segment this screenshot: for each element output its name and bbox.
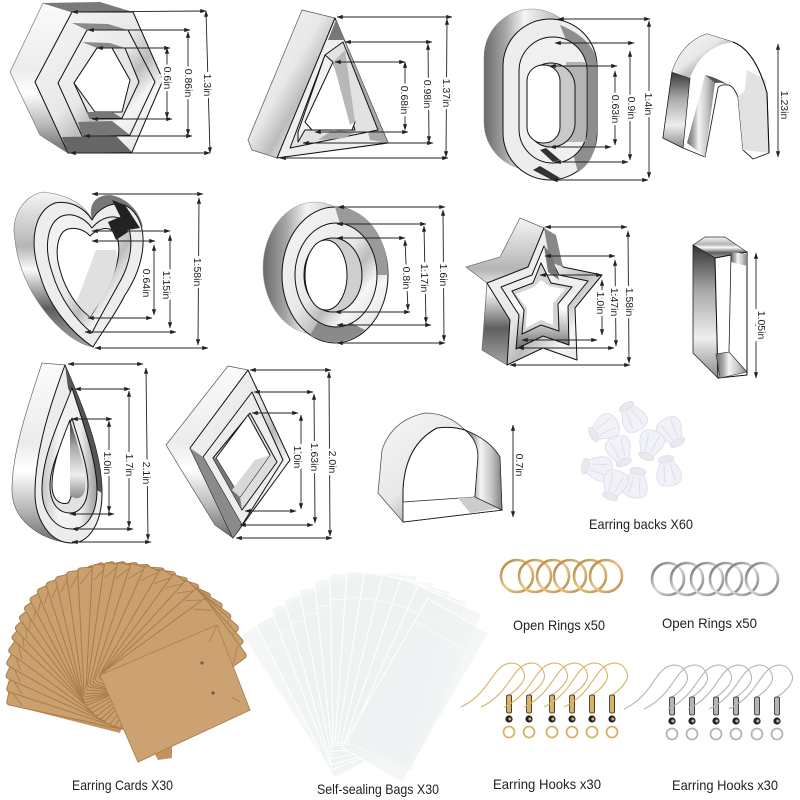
gold open rings: [501, 560, 622, 592]
dimensions: teardrop: 1.0in: [101, 452, 113, 475]
dimensions: star: 1.58in: [623, 288, 635, 316]
dimensions: triangle: 0.98in: [421, 80, 433, 108]
dimensions: D-shaped: [513, 425, 525, 517]
dimensions: heart: 1.58in: [191, 258, 203, 286]
slot cutter: [693, 237, 747, 378]
dimensions: heart: 0.64in: [140, 269, 152, 297]
dimensions: arch: 1.23in: [778, 91, 790, 119]
kraft earring cards fan: [5, 561, 250, 762]
round cutter set: [263, 202, 388, 343]
heart cutter set: [14, 192, 143, 347]
dimensions: hexagon: 0.86in: [182, 69, 194, 97]
dimensions: slot: 1.05in: [755, 311, 767, 339]
star cutter set: [466, 218, 602, 365]
dimensions: hexagon: [70, 11, 213, 153]
silver earring hooks: [624, 665, 793, 740]
triangle cutter set: [248, 10, 388, 158]
dimensions: round: [335, 207, 449, 343]
teardrop cutter set: [12, 363, 102, 543]
dimensions: hexagon: 1.3in: [201, 74, 213, 97]
dimensions: diamond: [236, 370, 338, 538]
dimensions: oval: 1.4in: [642, 93, 654, 116]
dimensions: heart: 1.15in: [160, 271, 172, 299]
gold earring hooks: [461, 663, 628, 738]
dimensions: star: [510, 227, 635, 365]
dimensions: triangle: [280, 17, 452, 158]
dimensions: diamond: 1.63in: [308, 443, 320, 471]
dimensions: oval: 0.63in: [609, 95, 621, 123]
dimensions: star: 1.0in: [594, 292, 606, 315]
oval cutter set: [484, 9, 597, 180]
dimensions: round: 1.6in: [437, 264, 449, 287]
dimensions: star: 1.47in: [608, 288, 620, 316]
dimensions: oval: [550, 19, 654, 180]
dimensions: D-shaped: 0.7in: [513, 454, 525, 477]
dimensions: hexagon: 0.6in: [161, 67, 173, 90]
silver open rings: [652, 563, 778, 595]
label: gold open rings: Open Rings x50: [513, 617, 605, 633]
dimensions: heart: [85, 194, 208, 348]
dimensions: slot: [755, 253, 767, 378]
label: earring cards: Earring Cards X30: [72, 777, 173, 793]
dimensions: teardrop: 2.1in: [140, 462, 152, 485]
dimensions: oval: 0.9in: [625, 97, 637, 120]
dimensions: diamond: 1.0in: [291, 446, 303, 469]
label: silver earring hooks: Earring Hooks x30: [672, 777, 778, 793]
dimensions: triangle: 0.68in: [398, 86, 410, 114]
label: earring backs: Earring backs X60: [589, 516, 693, 532]
dimensions: diamond: 2.0in: [326, 451, 338, 474]
label: gold earring hooks: Earring Hooks x30: [493, 776, 601, 792]
dimensions: arch: [778, 44, 790, 157]
dimensions: round: 0.8in: [400, 267, 412, 290]
self-sealing bags fan: [242, 571, 488, 782]
dimensions: round: 1.17in: [418, 264, 430, 292]
hexagon cutter set: [10, 2, 163, 153]
D-shaped cutter: [378, 413, 502, 522]
earring backs: [580, 397, 690, 504]
dimensions: triangle: 1.37in: [440, 79, 452, 107]
arch cutter: [663, 34, 769, 159]
dimensions: teardrop: 1.7in: [123, 454, 135, 477]
label: self-sealing bags: Self-sealing Bags X30: [317, 781, 439, 797]
dimensions: teardrop: [68, 364, 152, 542]
diamond cutter set: [166, 366, 290, 538]
label: silver open rings: Open Rings x50: [662, 615, 757, 631]
